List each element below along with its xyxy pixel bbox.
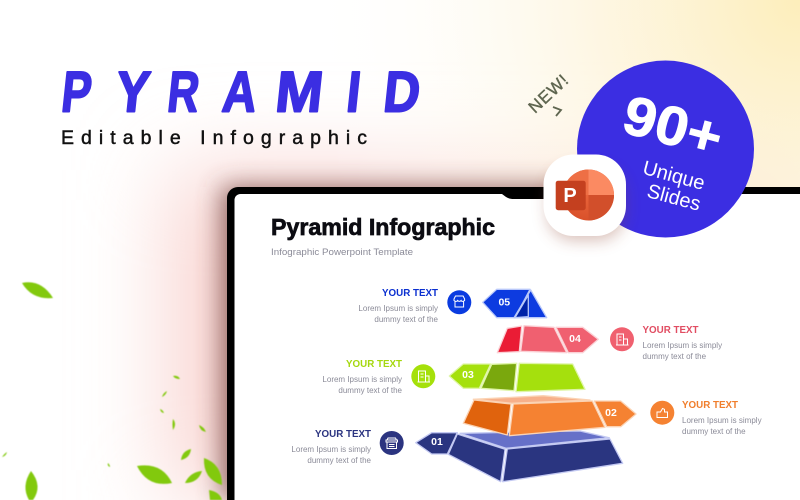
icon: box [650, 401, 674, 425]
callout 04: dummy text of the [642, 352, 707, 361]
icon: store [447, 290, 471, 314]
callout 03: YOUR TEXT [346, 358, 403, 370]
level 04: red: 04 [569, 333, 581, 345]
icon: shop front [380, 431, 404, 455]
callout 01 [291, 428, 404, 465]
level 03: green [449, 363, 585, 392]
badge: 90+ unique slides: 90+ [617, 83, 729, 169]
icon: buildings [610, 327, 634, 351]
callout 01: YOUR TEXT [315, 428, 372, 440]
level 03: green: 03 [462, 369, 474, 381]
level 02: orange [463, 396, 636, 436]
icon: office [411, 364, 435, 388]
icon: PowerPoint [544, 154, 626, 240]
callout 03: dummy text of the [338, 386, 403, 395]
callout 02: YOUR TEXT [682, 399, 739, 411]
callout 05: YOUR TEXT [382, 287, 439, 299]
badge: 90+ unique slides: Slides [645, 180, 703, 216]
callout 02: Lorem Ipsum is simply [682, 416, 762, 425]
title: PYRAMID: I [344, 61, 364, 124]
title: PYRAMID: M [273, 60, 326, 125]
laptop frame [227, 187, 800, 500]
leaves [2, 282, 222, 500]
subtitle: Editable Infographic [61, 127, 367, 149]
level 05: blue top [483, 289, 547, 318]
callout 04: Lorem Ipsum is simply [642, 341, 722, 350]
level 01: navy base [416, 431, 623, 482]
title: PYRAMID: A [220, 60, 260, 125]
title: PYRAMID: D [381, 60, 423, 124]
badge: 90+ unique slides: Unique [640, 157, 707, 195]
label: NEW!: NEW! [525, 71, 572, 117]
callout 04 [610, 324, 722, 361]
callout 03 [322, 358, 435, 395]
level 04: red [497, 326, 598, 353]
title: PYRAMID: Y [113, 60, 153, 124]
callout 05 [358, 287, 471, 324]
callout 02: dummy text of the [682, 427, 746, 436]
level 01: navy base: 01 [431, 436, 443, 448]
level 05: blue top: 05 [498, 296, 510, 308]
level 02: orange: 02 [605, 407, 617, 419]
callout 01: dummy text of the [307, 456, 372, 465]
pyramid [416, 289, 636, 482]
slide subheading: Infographic Powerpoint Template [271, 247, 413, 258]
callout 04: YOUR TEXT [642, 324, 699, 336]
callout 05: dummy text of the [374, 315, 439, 324]
callout 01: Lorem Ipsum is simply [291, 445, 371, 454]
icon: PowerPoint: P [563, 185, 577, 207]
badge: 90+ unique slides [577, 60, 754, 238]
callout 02 [650, 399, 762, 436]
callout 05: Lorem Ipsum is simply [358, 304, 438, 313]
title: PYRAMID [59, 59, 423, 125]
slide heading: Pyramid Infographic [271, 214, 495, 240]
callout 03: Lorem Ipsum is simply [322, 375, 402, 384]
title: PYRAMID: P [59, 59, 95, 124]
title: PYRAMID: R [165, 60, 203, 124]
